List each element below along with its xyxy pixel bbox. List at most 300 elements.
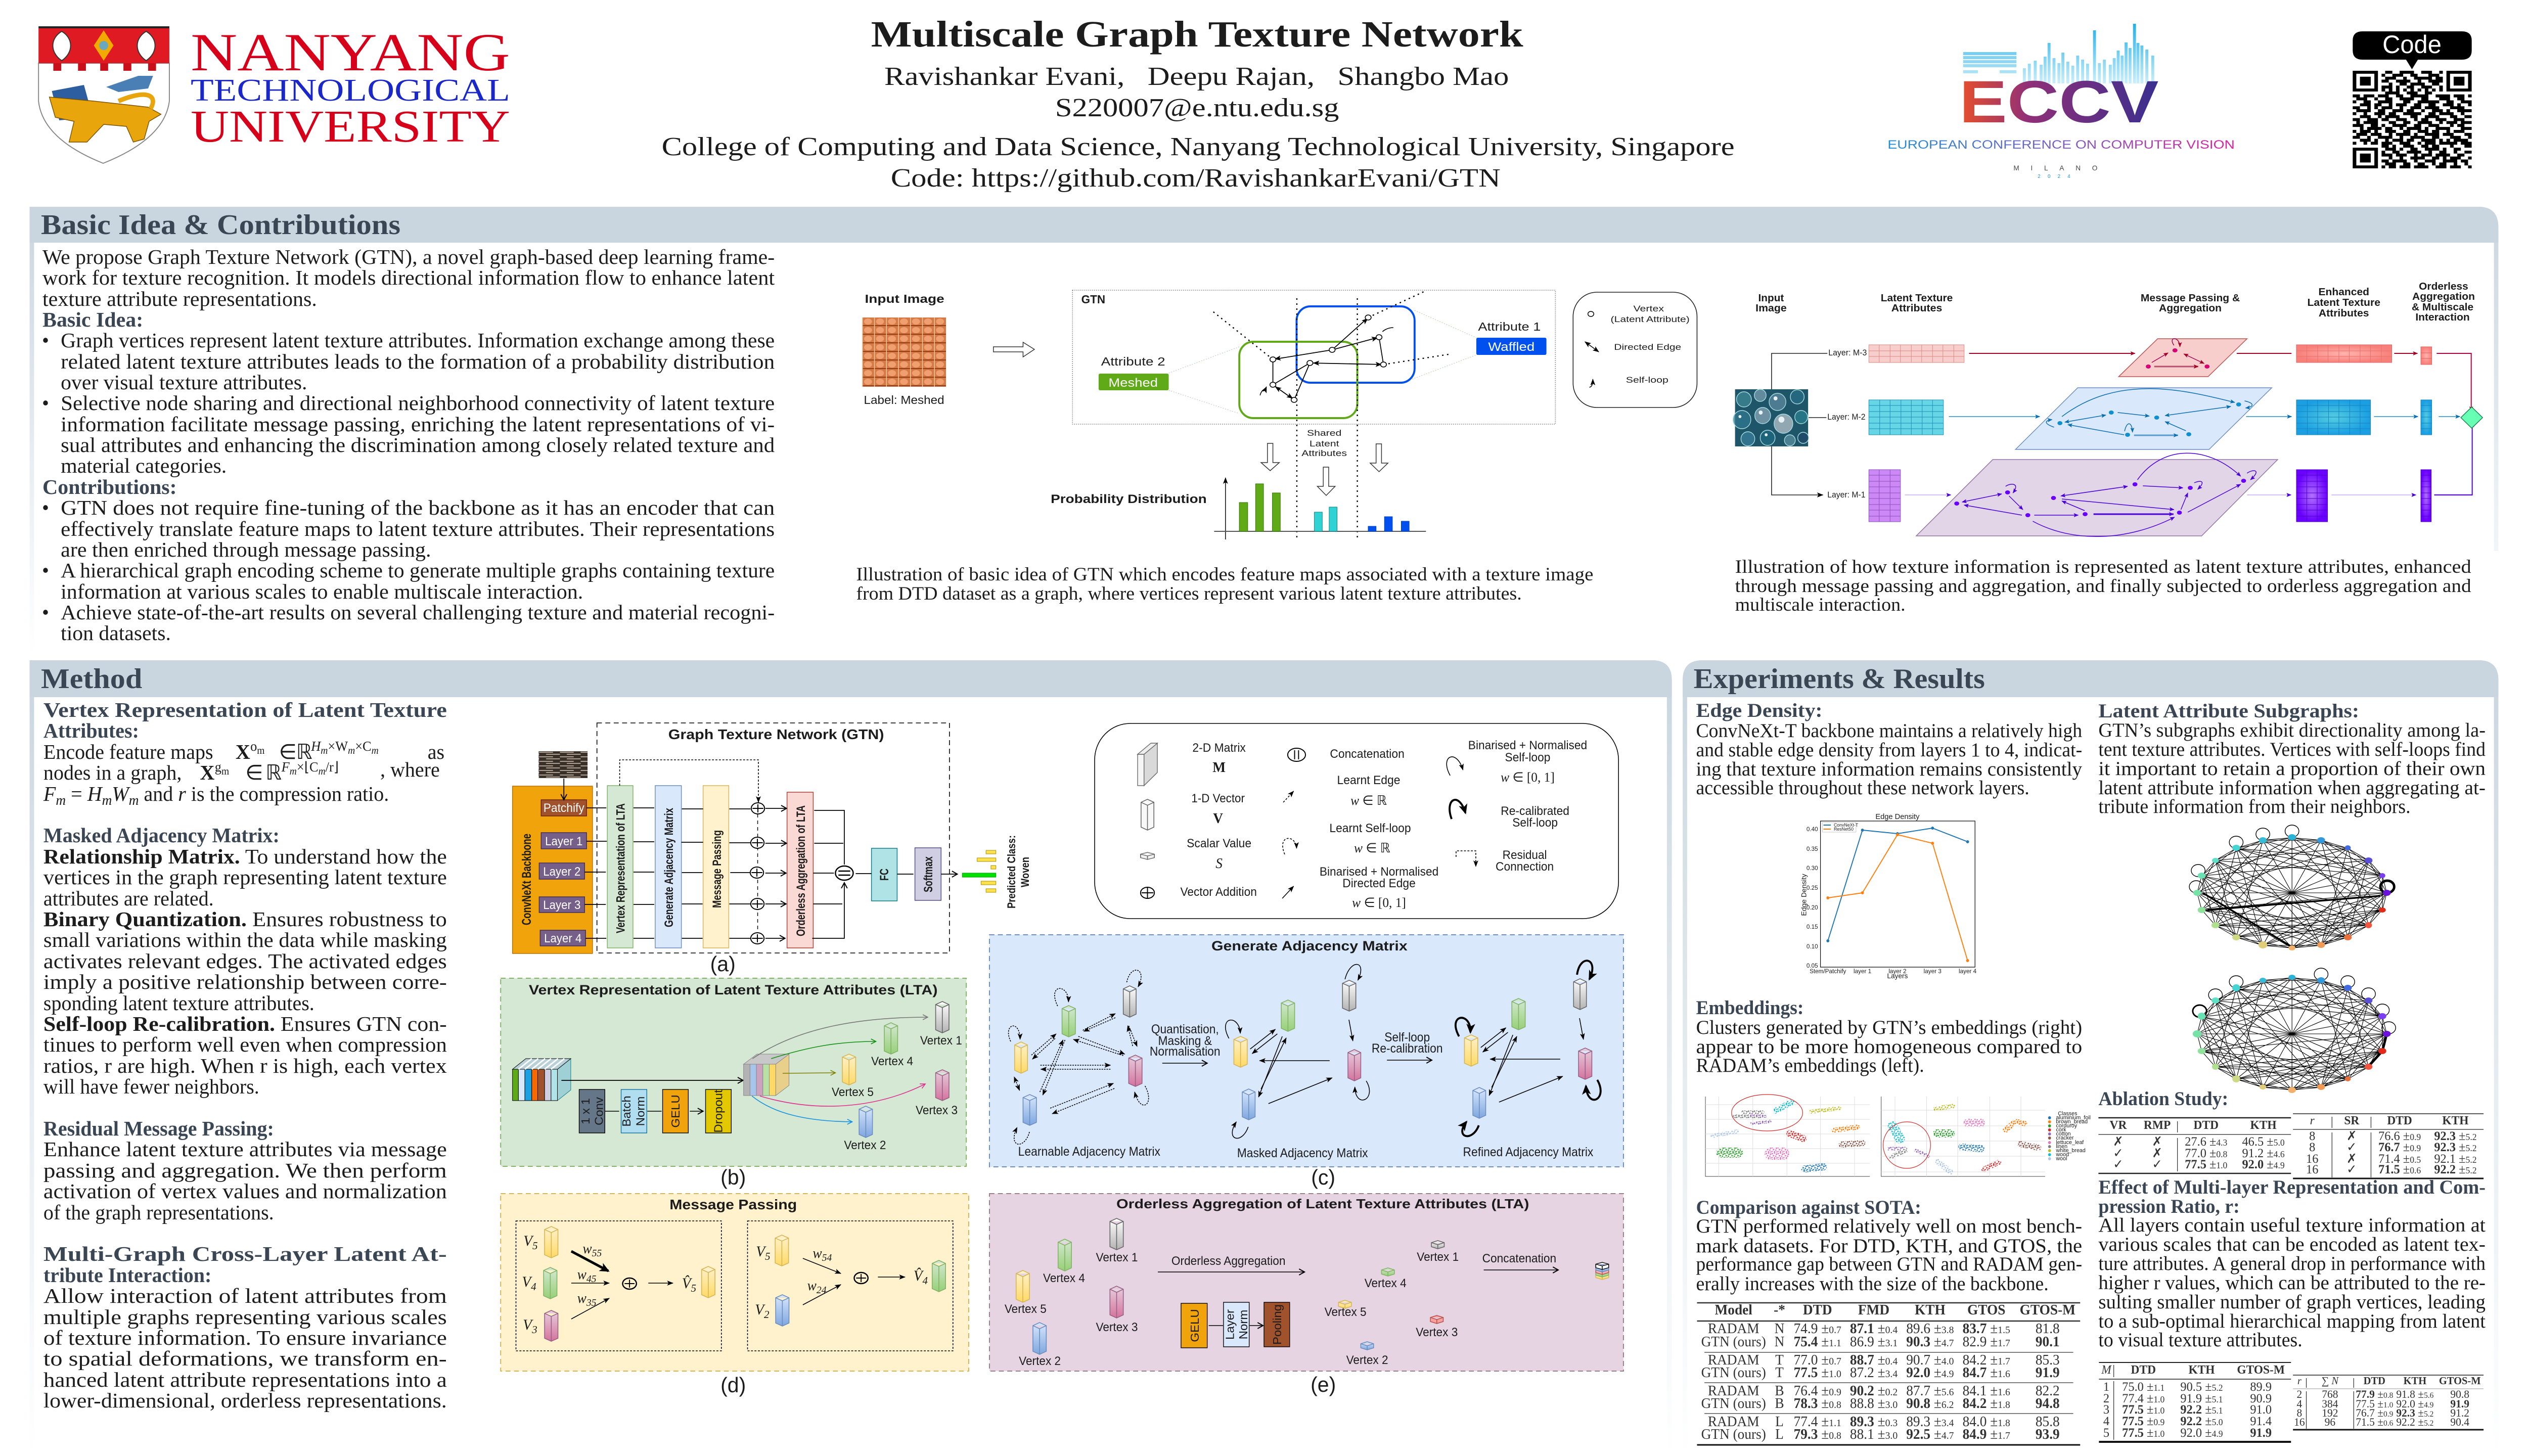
caption: Illustration of basic idea of GTN which encodes feature maps associated with a texture image [856,564,1593,584]
table: number of layers M: 90.5 ±5.2 [2180,1380,2223,1394]
scatter plot: GTN embeddings [1881,1097,2045,1176]
stage columns [607,786,941,948]
legend labels right: Re-calibrated [1501,805,1569,818]
table: ablation r/SR: 76.6 ±0.9 [2378,1129,2421,1143]
operation blocks: Pooling [1271,1304,1284,1345]
table: comparison against SOTA: 89.6 ±3.8 [1906,1321,1954,1336]
message passing to V5: 45 [586,1273,597,1285]
caption: multiscale interaction. [1735,594,1906,615]
section: comparison against SOTA: performance gap between GTN and RADAM gen- [1696,1254,2082,1275]
column headings: Latent Texture [1881,293,1953,304]
diagram legend [1095,723,1618,919]
table: number of layers M: 2 [2103,1392,2109,1405]
chart: edge density line plot: 0.25 [1807,884,1818,891]
table: comparison against SOTA: 93.9 [2036,1426,2060,1442]
message passing to V5: w [577,1266,586,1282]
table: comparison against SOTA: GTN (ours) [1701,1395,1766,1411]
graph plane: M-2 [2015,388,2272,449]
heading: Method [41,663,142,694]
section: embeddings [1696,997,2082,1076]
legend labels centre: Binarised + Normalised [1320,866,1438,879]
table: number of layers M: 92.2 ±5.0 [2180,1415,2223,1428]
legend: embedding classes: wood [2055,1152,2069,1158]
message passing to V5: V [522,1274,531,1290]
aggregated vertices: Vertex 4 [1365,1277,1407,1290]
legend: embedding classes: lettuce_leaf [2056,1140,2084,1146]
table: ablation VR/RMP [2098,1118,2291,1173]
arrows: down to distribution [1261,443,1388,495]
message passing to V4: 5 [765,1250,771,1262]
chart: edge density line plot: 0.35 [1807,845,1818,852]
table: ablation VR/RMP: 27.6 ±4.3 [2185,1135,2227,1149]
table: compression ratio r: 192 [2322,1407,2338,1419]
legend: vertex, edge, self-loop: Self-loop [1626,375,1668,385]
table: comparison against SOTA: L [1775,1414,1784,1429]
masked adjacency graph [1226,965,1370,1160]
table: comparison against SOTA: Model [1715,1302,1752,1317]
section: comparison against SOTA: Comparison against SOTA: [1696,1197,1921,1218]
legend: embedding classes: cork [2056,1127,2066,1133]
table: ablation VR/RMP: KTH [2250,1119,2277,1132]
grids: latent texture attributes [1869,345,1964,522]
text block: method description: ×C [355,739,372,754]
legend: embedding classes: brown_bread [2056,1119,2088,1125]
section: multi-layer representation and compression ratio: Effect of Multi-layer Representation and Com- [2098,1177,2486,1198]
legend: embedding classes: cotton [2056,1131,2071,1137]
vertices: Vertex 4 [871,1055,913,1068]
table: compression ratio r: 96 [2325,1416,2335,1428]
table: compression ratio r: 76.7 ±0.9 [2356,1407,2393,1419]
text block: method description: o [250,739,257,754]
text block: introduction and bullet lists: are then enriched through message passing. [61,538,431,561]
diagram title: Graph Texture Network (GTN) [668,726,884,742]
table: ablation r/SR: 92.2 ±5.2 [2434,1163,2477,1176]
table: compression ratio r: 16 [2294,1416,2305,1428]
curved arrows to vertices [752,1017,928,1122]
chart: edge density line plot: Stem/Patchify [1810,968,1846,975]
input texture image [538,751,588,778]
table: comparison against SOTA: 76.4 ±0.9 [1794,1383,1841,1398]
legend labels centre [1320,748,1438,910]
table: comparison against SOTA: KTH [1915,1302,1946,1317]
section: multi-layer representation and compression ratio: higher r values, which can be attributed to the re- [2098,1272,2486,1294]
title: Multiscale Graph Texture Network [871,14,1523,55]
section: edge density: ConvNeXt-T backbone maintains a relatively high [1696,720,2082,742]
section: multi-layer representation and compression ratio: to visual texture attributes. [2098,1330,2303,1351]
legend: embedding classes: corduroy [2056,1123,2078,1129]
table: comparison against SOTA: RADAM [1708,1414,1759,1429]
table: compression ratio r: 90.4 [2450,1416,2469,1428]
table: comparison against SOTA: 84.2 ±1.8 [1963,1395,2010,1411]
text: 2024: 2024 [2038,174,2070,179]
text block: introduction and bullet lists: related latent texture attributes leads to the formation of a probability distribution [61,350,775,373]
text block: method description: Encode feature maps [43,741,213,763]
legend labels right: Residual [1503,849,1547,862]
table: comparison against SOTA: 86.9 ±3.1 [1850,1334,1898,1349]
legend labels left: Scalar Value [1187,837,1251,850]
table: number of layers M: 75.0 ±1.1 [2122,1380,2164,1394]
table: number of layers M: 91.9 ±5.1 [2180,1392,2223,1405]
chart: edge density line plot [1799,813,1977,980]
table: ablation r/SR [2293,1114,2484,1178]
text block: method description: Multi-Graph Cross-Layer Latent At- [43,1243,447,1265]
table: ablation r/SR: 71.4 ±0.5 [2378,1152,2421,1166]
table: number of layers M: 3 [2103,1403,2109,1417]
icon: skyline bars [1963,24,2153,83]
legend: vertex, edge, self-loop: Directed Edge [1614,342,1681,352]
text block: method description: /r⌋ [326,759,339,775]
text block: method description: Residual Message Passing: [43,1117,274,1140]
table: comparison against SOTA: 77.0 ±0.7 [1794,1352,1841,1368]
section: embeddings: Clusters generated by GTN’s embeddings (right) [1696,1017,2082,1038]
message passing to V5 [516,1221,721,1351]
message passing to V4: V [755,1302,764,1318]
legend: embedding classes: cracker [2056,1135,2074,1141]
table: compression ratio r: 92.2 ±5.2 [2396,1416,2433,1428]
table: ablation VR/RMP: ✗ [2113,1134,2124,1149]
table: comparison against SOTA: 94.8 [2036,1395,2060,1411]
input vertices: Vertex 2 [1019,1355,1061,1368]
section: comparison against SOTA [1696,1197,2082,1295]
table: comparison against SOTA: 82.9 ±1.7 [1963,1334,2010,1349]
legend labels centre: w ∈ ℝ [1354,841,1390,855]
table: comparison against SOTA: RADAM [1708,1321,1759,1336]
panel title: Message Passing [669,1197,797,1212]
message passing to V4: 2 [764,1308,770,1321]
table: comparison against SOTA: 90.7 ±4.0 [1906,1352,1954,1368]
arrows: into message passing [1905,353,2135,495]
stage columns: FC [878,869,891,881]
column headings: Message Passing & [2141,293,2240,304]
text block: method description: m [372,745,379,756]
text block: introduction and bullet lists: tion datasets. [61,622,171,645]
message passing to V5: 5 [691,1282,696,1294]
affiliation: College of Computing and Data Science, Nanyang Technological University, Singapore [662,132,1735,161]
text block: method description: Vertex Representation of Latent Texture [43,699,447,721]
text block: introduction and bullet lists: Achieve state-of-the-art results on several challenging texture and material recogni- [61,601,775,624]
table: ablation r/SR: 76.7 ±0.9 [2378,1141,2421,1154]
text block: introduction and bullet lists: work for texture recognition. It models directional information flow to enhance latent [42,266,775,289]
text block: method description: Allow interaction of latent attributes from [43,1285,447,1307]
table: number of layers M: 90.9 [2250,1392,2272,1405]
chart: edge density line plot: ConvNeXt-T [1834,823,1859,828]
message passing to V4: V [756,1244,765,1260]
text block: introduction and bullet lists: effectively translate feature maps to latent texture attributes. Their representations [61,518,775,540]
table: comparison against SOTA: 90.2 ±0.2 [1850,1383,1898,1398]
code url: Code: https://github.com/RavishankarEvani/GTN [891,163,1501,193]
legend labels centre: Learnt Edge [1337,774,1401,787]
legend labels right: w ∈ [0, 1] [1501,770,1555,785]
text: University: UNIVERSITY [191,102,510,152]
table: compression ratio r: 2 [2296,1388,2302,1400]
text block: method description: imply a positive relationship between corre- [43,971,447,993]
text block: method description: vertices in the graph representing latent texture [43,866,447,889]
chart: edge density line plot: 0.30 [1807,864,1818,872]
table: compression ratio r: 77.9 ±0.8 [2356,1388,2393,1400]
panel title: Generate Adjacency Matrix [1211,938,1408,953]
GTN graph box [1072,290,1555,541]
table: compression ratio r: 4 [2296,1398,2302,1410]
text block: method description: g [215,759,221,775]
message passing to V5: 4 [531,1281,536,1293]
text block: method description: ℝ [296,740,312,764]
legend labels right: Self-loop [1505,751,1550,764]
input image [862,292,946,406]
ConvNeXt backbone: Layer 1 [545,835,582,848]
stage columns: Vertex Representation of LTA [614,803,627,933]
operation blocks: 1 x 1 [579,1098,593,1124]
table: ablation r/SR: ✓ [2346,1140,2357,1154]
text: Nanyang: NANYANG [191,23,510,82]
column headings: Interaction [2415,312,2470,323]
operation blocks: Norm [635,1097,647,1126]
table: comparison against SOTA: 87.1 ±0.4 [1850,1321,1898,1336]
table: ablation r/SR: 92.3 ±5.2 [2434,1129,2477,1143]
table: comparison against SOTA: 77.5 ±1.0 [1794,1364,1841,1380]
legend labels centre: Directed Edge [1342,877,1416,890]
message passing to V5: w [582,1241,592,1256]
message passing to V5: V [523,1317,532,1333]
legend: embedding classes [2048,1111,2091,1162]
text block: method description: m [348,745,355,756]
table: ablation VR/RMP: ✓ [2113,1157,2124,1171]
table: comparison against SOTA: 89.3 ±3.4 [1906,1414,1954,1429]
label: predicted class: Predicted Class: [1005,835,1018,908]
text block: method description: F [43,783,57,805]
table: ablation r/SR: 92.1 ±5.2 [2434,1152,2477,1166]
text block: introduction and bullet lists: Graph vertices represent latent texture attributes. Information exchange among these [61,329,775,352]
chart: edge density line plot: ResNet50 [1834,827,1854,832]
label: predicted class: Woven [1018,857,1031,887]
section: multi-layer representation and compression ratio [2098,1177,2486,1351]
table: comparison against SOTA: RADAM [1708,1383,1759,1398]
operation blocks: Conv [593,1097,606,1125]
vertices: Vertex 5 [832,1086,874,1099]
operation blocks: Norm [1237,1310,1250,1339]
diagram (a): network architecture [513,723,1031,976]
caption: Illustration of how texture information is represented as latent texture attributes, enhanced [1735,556,2471,577]
icon: concatenation [835,866,853,880]
message passing to V4 [748,1221,953,1351]
label (e): (e) [1311,1373,1336,1396]
stage columns: Message Passing [710,830,724,908]
text block: introduction and bullet lists: • [42,601,49,624]
table: comparison against SOTA: 87.7 ±5.6 [1906,1383,1954,1398]
stage columns: Softmax [922,856,935,892]
table: compression ratio r: GTOS-M [2439,1376,2481,1387]
section: embeddings: Embeddings: [1696,997,1803,1019]
concatenated stack [1596,1262,1609,1280]
qr code [2353,71,2472,168]
text block: method description: will have fewer neighbors. [43,1075,259,1098]
table: comparison against SOTA [1697,1302,2080,1445]
table: ablation r/SR: 71.5 ±0.6 [2378,1163,2421,1176]
layer connectors [1772,348,1867,499]
table: comparison against SOTA: -* [1774,1302,1785,1317]
text block: method description: m [129,792,139,808]
column headings: Image [1755,303,1787,314]
recalibration step [1372,1031,1443,1060]
section: multi-layer representation and compression ratio: to a sub-optimal hierarchical mapping from latent [2098,1311,2486,1332]
feature stack [513,1059,571,1101]
text block: method description: Relationship Matrix. To understand how the [43,845,447,868]
legend: vertex, edge, self-loop: Vertex [1633,304,1664,313]
text block: method description: m [321,745,328,756]
table: ablation VR/RMP: ✓ [2152,1157,2162,1171]
message passing to V5: V [523,1233,532,1249]
ConvNeXt backbone: Layer 2 [543,866,580,879]
aggregated vertices: Vertex 3 [1416,1326,1458,1339]
table: ablation r/SR: ✗ [2346,1128,2357,1143]
ConvNeXt backbone [513,786,593,953]
flow arrows [564,760,958,938]
text block: method description: as [428,741,444,763]
table: ablation r/SR: 92.3 ±5.2 [2434,1141,2477,1154]
text block: method description: tribute Interaction: [43,1264,211,1287]
icon: NTU shield [38,26,169,163]
text block: method description: Binary Quantization. Ensures robustness to [43,908,447,931]
text block: method description: ratios, r are high. When r is high, each vertex [43,1055,447,1077]
column headings: & Multiscale [2412,302,2473,313]
logo: ECCV [1887,24,2235,179]
icon: 1-D vector [1141,799,1154,830]
section: edge density: ing that texture information remains consistently [1696,759,2083,780]
message passing to V4: V̂ [914,1268,923,1284]
table: comparison against SOTA: 88.1 ±3.0 [1850,1426,1898,1442]
message passing to V4: w [812,1245,822,1261]
table: comparison against SOTA: RADAM [1708,1352,1759,1368]
section: edge density: Edge Density: [1696,700,1822,721]
message passing to V5: 35 [586,1297,597,1308]
table: comparison against SOTA: T [1775,1352,1784,1368]
table: number of layers M: DTD [2131,1363,2156,1377]
column headings: Latent Texture [2307,297,2380,308]
operation blocks: Dropout [712,1089,726,1133]
text block: method description: m [319,766,326,777]
column headings: Orderless [2419,281,2468,292]
recalibration step: Re-calibration [1372,1042,1443,1056]
label (b): (b) [720,1165,746,1189]
text block: method description: activation of vertex values and normalization [43,1180,447,1203]
label: shared latent attributes [1301,428,1347,458]
input vertices [1005,1218,1138,1368]
table: comparison against SOTA: 87.2 ±3.4 [1850,1364,1898,1380]
output class bars [962,850,996,892]
text block: method description: small variations within the data while masking [43,929,447,951]
column headings: Input [1758,293,1784,304]
table: compression ratio r [2293,1375,2484,1430]
label (a): (a) [710,952,736,976]
title block [662,14,1735,193]
text block: method description: H [310,739,322,754]
table: number of layers M: 77.5 ±0.9 [2122,1415,2164,1428]
section: latent attribute subgraphs: tribute information from their neighbors. [2098,796,2411,817]
input vertices: Vertex 1 [1096,1251,1138,1264]
text block: method description [43,699,447,1412]
legend labels left: S [1215,855,1223,871]
text block: introduction and bullet lists: over visual texture attributes. [61,371,307,394]
label (c): (c) [1311,1165,1335,1189]
column headings: Enhanced [2318,287,2369,298]
section: latent attribute subgraphs: Latent Attribute Subgraphs: [2098,701,2359,722]
table: ablation r/SR: DTD [2387,1114,2412,1127]
table: ablation VR/RMP: DTD [2194,1119,2219,1132]
quantisation step: Normalisation [1150,1045,1221,1059]
table: compression ratio r: 8 [2296,1407,2302,1419]
aggregated vertices: Vertex 2 [1346,1354,1388,1367]
text block: method description: nodes in a graph, [43,761,182,784]
table: number of layers M: 77.5 ±1.0 [2122,1426,2164,1440]
ConvNeXt backbone: ConvNeXt Backbone [520,834,534,925]
text block: introduction and bullet lists: We propose Graph Texture Network (GTN), a novel graph-based deep learning frame- [42,246,775,268]
ConvNeXt backbone: Layer 4 [544,932,581,945]
scatter plot: RADAM embeddings [1705,1095,1870,1176]
table: comparison against SOTA: 89.3 ±0.3 [1850,1414,1898,1429]
table: ablation r/SR: ✗ [2346,1151,2357,1166]
learnable adjacency graph [1009,970,1161,1159]
table: comparison against SOTA: N [1775,1321,1784,1336]
table: comparison against SOTA: N [1775,1334,1784,1349]
graph plane: M-1 [1916,453,2278,536]
graph: subgraph 1 [2189,825,2394,950]
table: comparison against SOTA: 78.3 ±0.8 [1794,1395,1841,1411]
column headings [1755,281,2475,323]
text block: method description: m [102,792,112,808]
text block: introduction and bullet lists: • [42,392,49,415]
table: comparison against SOTA: 85.3 [2036,1352,2060,1368]
message passing to V4: 24 [817,1285,827,1296]
operation blocks: Layer [1224,1309,1237,1340]
icon: fusion diamond [2461,407,2482,428]
operation blocks [1181,1302,1290,1348]
quantisation step [1150,1023,1221,1063]
table: number of layers M: 91.9 [2250,1426,2272,1440]
table: comparison against SOTA: 90.8 ±6.2 [1906,1395,1954,1411]
text: Technological: TECHNOLOGICAL [191,73,510,108]
aggregated vertices: Vertex 5 [1325,1306,1367,1319]
section: embeddings: appear to be more homogeneous compared to [1696,1036,2082,1058]
grids: enhanced latent texture attributes [2296,345,2391,522]
message passing to V4: 54 [822,1252,832,1263]
table: compression ratio r: ∑ N [2322,1376,2339,1387]
table: number of layers M: 5 [2103,1426,2109,1440]
table: number of layers M: 92.0 ±4.9 [2180,1426,2223,1440]
chart: edge density line plot: layer 2 [1888,968,1907,975]
chart: edge density line plot: layer 4 [1959,968,1977,975]
section: latent attribute subgraphs: it important to retain a proportion of their own [2098,758,2486,780]
callout: Code [2353,30,2472,69]
refined adjacency graph: Refined Adjacency Matrix [1463,1146,1594,1159]
message passing to V5: w [577,1290,586,1306]
email: S220007@e.ntu.edu.sg [1055,93,1339,122]
section: multi-layer representation and compression ratio: pression Ratio, r: [2098,1196,2240,1217]
concatenation arrow: Concatenation [1482,1252,1556,1265]
learnable adjacency graph: Learnable Adjacency Matrix [1018,1145,1161,1159]
text block: method description: of the graph representations. [43,1201,274,1224]
icon: scalar [1141,852,1154,859]
icon: 2-D matrix [1138,743,1157,786]
section: edge density: and stable edge density from layers 1 to 4, indicat- [1696,740,2082,761]
text block: method description: and [139,783,178,805]
caption: from DTD dataset as a graph, where vertices represent various latent texture attributes. [856,583,1522,604]
legend: embedding classes: Classes [2058,1111,2078,1117]
input vertices: Vertex 3 [1096,1321,1138,1334]
section: comparison against SOTA: GTN performed relatively well on most bench- [1696,1216,2082,1237]
refined adjacency graph [1456,961,1601,1159]
label (d): (d) [720,1373,746,1397]
input vertices: Vertex 4 [1043,1272,1085,1285]
table: comparison against SOTA: 91.9 [2036,1364,2060,1380]
